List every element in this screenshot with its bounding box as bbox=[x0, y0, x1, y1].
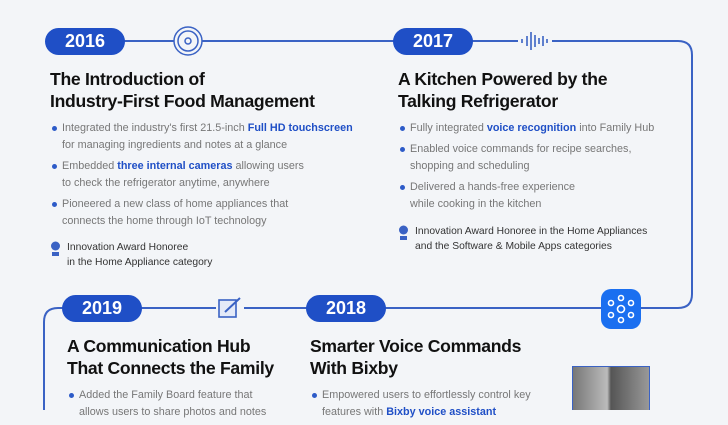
award 2016 bbox=[51, 242, 212, 268]
icon: hub bbox=[601, 289, 641, 329]
heading 2016 bbox=[50, 69, 315, 111]
bullets 2018: features with Bixby voice assistant bbox=[322, 406, 496, 418]
heading 2017: Talking Refrigerator bbox=[398, 91, 558, 111]
pill 2016 bbox=[45, 28, 125, 55]
heading 2016: The Introduction of bbox=[50, 69, 205, 89]
heading 2019: A Communication Hub bbox=[67, 336, 250, 356]
bullets 2019: allows users to share photos and notes bbox=[79, 406, 266, 418]
bullets 2016: connects the home through IoT technology bbox=[62, 215, 266, 227]
heading 2016: Industry-First Food Management bbox=[50, 91, 315, 111]
bullets 2016: for managing ingredients and notes at a glance bbox=[62, 139, 287, 151]
icon: sound wave bbox=[518, 32, 552, 50]
award 2016: in the Home Appliance category bbox=[67, 257, 212, 268]
bullets 2018: Empowered users to effortlessly control key bbox=[322, 389, 531, 401]
bullets 2019 bbox=[69, 389, 266, 418]
bullets 2017: shopping and scheduling bbox=[410, 160, 529, 172]
icon: camera focus bbox=[173, 26, 203, 56]
heading 2018: With Bixby bbox=[310, 358, 398, 378]
heading 2019: That Connects the Family bbox=[67, 358, 274, 378]
bullets 2016: Pioneered a new class of home appliances that bbox=[62, 198, 288, 210]
bullets 2017: Fully integrated voice recognition into Family Hub bbox=[410, 122, 654, 134]
bullets 2016 bbox=[52, 122, 353, 227]
pill 2017 bbox=[393, 28, 473, 55]
award 2016: Innovation Award Honoree bbox=[67, 242, 188, 253]
heading 2019 bbox=[67, 336, 274, 378]
award 2017: Innovation Award Honoree in the Home Appliances bbox=[415, 226, 647, 237]
pill 2017: 2017 bbox=[413, 31, 453, 51]
bullets 2019: Added the Family Board feature that bbox=[79, 389, 252, 401]
pill 2019: 2019 bbox=[82, 298, 122, 318]
bullets 2017: Delivered a hands-free experience bbox=[410, 181, 575, 193]
pill 2018 bbox=[306, 295, 386, 322]
bullets 2016: Integrated the industry's first 21.5-inch Full HD touchscreen bbox=[62, 122, 353, 134]
bullets 2017: while cooking in the kitchen bbox=[410, 198, 541, 210]
heading 2017: A Kitchen Powered by the bbox=[398, 69, 607, 89]
bullets 2016: Embedded three internal cameras allowing users bbox=[62, 160, 304, 172]
icon: pencil board bbox=[216, 297, 244, 318]
heading 2018: Smarter Voice Commands bbox=[310, 336, 521, 356]
bullets 2017: Enabled voice commands for recipe searches, bbox=[410, 143, 631, 155]
pill 2016: 2016 bbox=[65, 31, 105, 51]
fridge image bbox=[572, 366, 650, 410]
pill 2019 bbox=[62, 295, 142, 322]
heading 2018 bbox=[310, 336, 521, 378]
pill 2018: 2018 bbox=[326, 298, 366, 318]
heading 2017 bbox=[398, 69, 607, 111]
bullets 2017 bbox=[400, 122, 654, 210]
bullets 2018 bbox=[312, 389, 531, 418]
bullets 2016: to check the refrigerator anytime, anywhere bbox=[62, 177, 270, 189]
award 2017: and the Software & Mobile Apps categories bbox=[415, 241, 612, 252]
award 2017 bbox=[399, 226, 647, 252]
